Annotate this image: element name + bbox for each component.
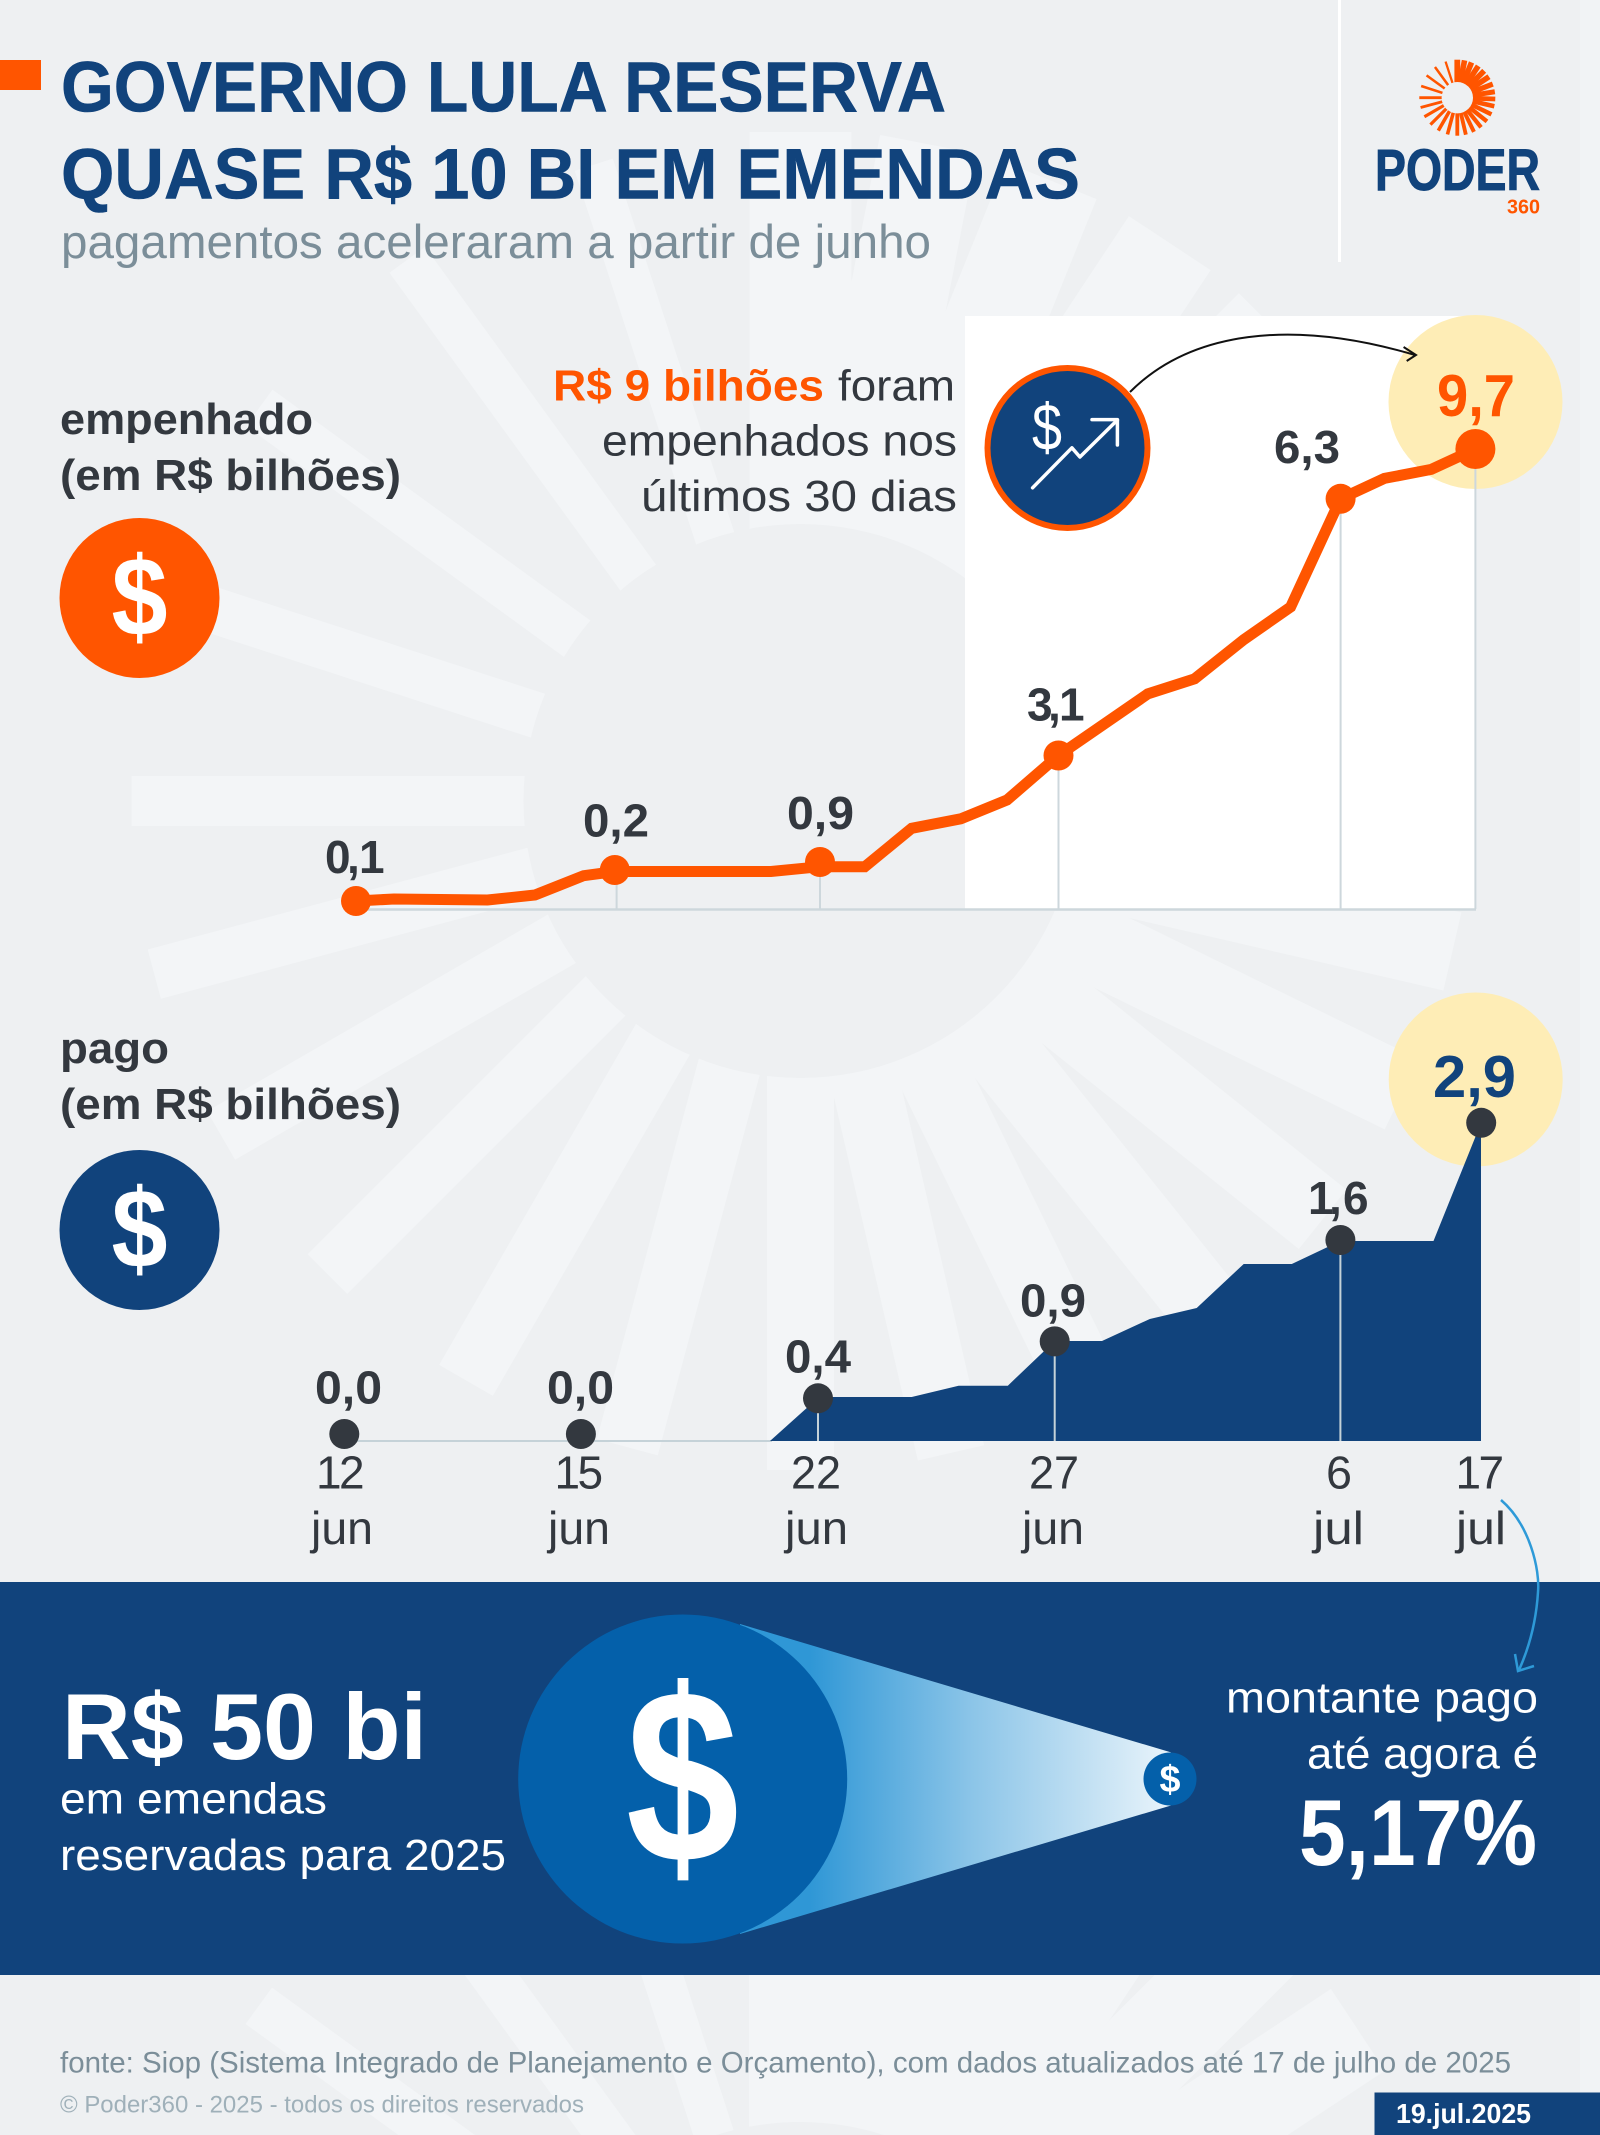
band background <box>0 1582 1600 1975</box>
copyright: © Poder360 - 2025 - todos os direitos reservados <box>60 2092 584 2118</box>
logo sunburst icon <box>1419 60 1495 136</box>
line chart: empenhado <box>325 363 1515 916</box>
highlight circle: 9,7 <box>1388 315 1562 489</box>
callout: R$ 9 bilhões: últimos 30 dias <box>641 472 957 521</box>
small dollar coin <box>1144 1752 1196 1806</box>
value labels <box>325 421 1340 883</box>
date axis labels: 6 <box>1326 1446 1352 1498</box>
markers <box>341 429 1495 916</box>
icon: dollar with rising arrow: $ <box>1032 390 1062 464</box>
date axis labels: jun <box>546 1502 610 1554</box>
section label: empenhado: (em R$ bilhões) <box>60 451 401 500</box>
white highlight panel: last 30 days <box>965 316 1475 909</box>
title: QUASE R$ 10 BI EM EMENDAS <box>61 136 1080 214</box>
highlighted value 9,7: 9,7 <box>1437 363 1515 429</box>
navy area <box>770 1123 1481 1441</box>
title: GOVERNO LULA RESERVA <box>61 48 946 128</box>
logo wordmark: PODER <box>1375 138 1540 203</box>
area chart: pago <box>315 1044 1516 1449</box>
value labels: 3,1 <box>1027 678 1085 730</box>
montante pago text: até agora é <box>1307 1730 1538 1778</box>
source note: fonte: Siop (Sistema Integrado de Planejamento e Orçamento), com dados atualizados até 17 de julho de 2025 <box>60 2046 1511 2080</box>
date axis labels: 15 <box>554 1446 603 1498</box>
value labels: 6,3 <box>1274 421 1340 473</box>
section label: empenhado <box>60 395 401 500</box>
highlight circle: 2,9 <box>1389 992 1563 1166</box>
date axis labels: jun <box>783 1502 848 1554</box>
markers <box>329 1108 1496 1449</box>
date axis labels: 22 <box>791 1446 841 1498</box>
date axis labels: 17 <box>1456 1446 1504 1498</box>
icon: orange dollar coin: $ <box>112 534 168 659</box>
baseline <box>344 1440 772 1442</box>
value labels: 0,9 <box>1020 1274 1086 1326</box>
background watermark: sunburst <box>132 132 1469 1470</box>
date axis labels: jun <box>1020 1502 1084 1554</box>
section label: pago: pago <box>60 1024 169 1073</box>
date badge <box>1374 2092 1600 2135</box>
orange accent square <box>0 60 41 90</box>
big dollar coin <box>518 1614 847 1944</box>
value labels: 0,1 <box>325 831 385 883</box>
axis <box>356 908 1476 911</box>
arrow: icon to 9,7 <box>1130 335 1416 392</box>
icon: navy dollar coin <box>60 1150 220 1310</box>
date axis labels: 27 <box>1029 1446 1079 1498</box>
section label: empenhado: empenhado <box>60 395 313 444</box>
R$ 50 bi text <box>60 1674 506 1880</box>
icon: orange dollar coin <box>60 518 220 678</box>
title <box>61 48 1080 214</box>
date badge: 19.jul.2025 <box>1396 2098 1531 2129</box>
callout: R$ 9 bilhões: empenhados nos <box>602 416 957 466</box>
montante pago text: montante pago <box>1226 1674 1538 1722</box>
callout: R$ 9 bilhões <box>553 362 957 521</box>
icon: dollar with rising arrow <box>988 368 1148 528</box>
arrow: 17 jul to montante pago <box>1501 1500 1538 1671</box>
date axis labels: jun <box>309 1502 373 1554</box>
logo divider <box>1338 0 1341 262</box>
logo 360: 360 <box>1507 196 1540 218</box>
callout: R$ 9 bilhões: R$ 9 bilhões <box>553 362 824 410</box>
section label: pago: (em R$ bilhões) <box>60 1080 401 1129</box>
value labels: 0,4 <box>785 1330 851 1382</box>
date axis labels: jul <box>1454 1502 1506 1554</box>
section label: pago <box>60 1024 401 1129</box>
callout: R$ 9 bilhões: foram <box>838 362 955 410</box>
date axis labels <box>309 1446 1506 1554</box>
value labels: 0,0 <box>315 1362 382 1414</box>
icon: navy dollar coin: $ <box>112 1166 168 1291</box>
big dollar coin: $ <box>626 1637 739 1915</box>
date axis labels: 12 <box>316 1446 365 1498</box>
montante pago text: 5,17% <box>1299 1780 1537 1885</box>
subtitle: pagamentos aceleraram a partir de junho <box>61 215 931 268</box>
ticks <box>817 1398 819 1441</box>
panel: total band <box>0 1582 1600 1975</box>
orange line <box>356 449 1475 901</box>
logo: Poder360 <box>1375 60 1540 219</box>
background watermark: footer sunburst <box>246 1730 1385 2135</box>
date axis labels: jul <box>1311 1502 1364 1554</box>
value labels: 0,0 <box>547 1362 614 1414</box>
value labels: 0,2 <box>583 794 649 846</box>
small dollar coin: $ <box>1160 1759 1180 1801</box>
value labels: 0,9 <box>787 787 854 839</box>
cone comparing totals <box>740 1624 1171 1934</box>
value labels: 1,6 <box>1308 1172 1369 1224</box>
value labels <box>315 1172 1369 1414</box>
R$ 50 bi text: reservadas para 2025 <box>60 1831 506 1880</box>
montante pago text <box>1226 1674 1538 1885</box>
R$ 50 bi text: R$ 50 bi <box>62 1674 427 1779</box>
header title block <box>0 48 1080 268</box>
highlighted value 2,9: 2,9 <box>1433 1044 1516 1110</box>
R$ 50 bi text: em emendas <box>60 1774 327 1824</box>
